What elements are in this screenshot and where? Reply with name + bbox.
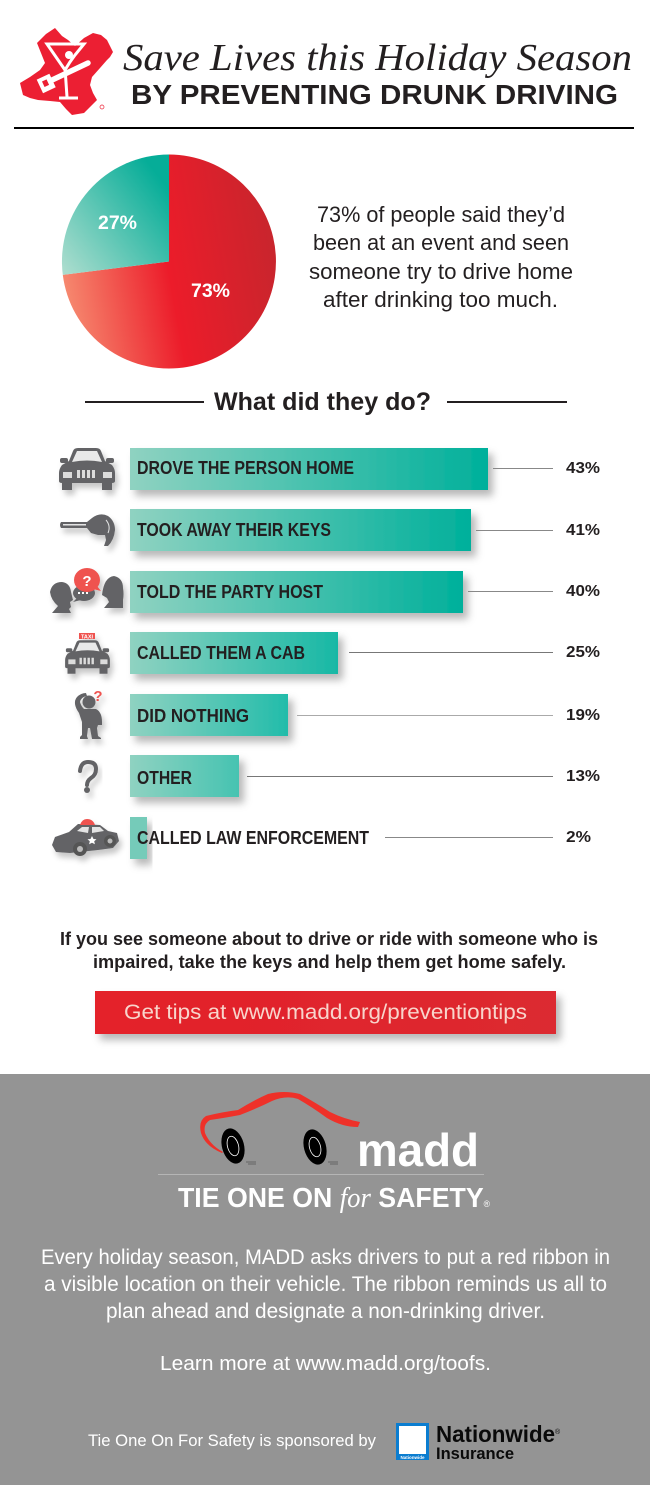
row: law enforcement: CALLED LAW ENFORCEMENT bbox=[137, 828, 369, 848]
row: drove home bbox=[59, 448, 600, 490]
row: party host: TOLD THE PARTY HOST bbox=[137, 582, 323, 602]
button: tips bbox=[95, 991, 556, 1034]
row: cab: CALLED THEM A CAB bbox=[137, 643, 305, 663]
icon: taxi bbox=[65, 633, 110, 674]
link text: Learn more at www.madd.org/toofs. bbox=[160, 1353, 491, 1375]
icon: police car bbox=[52, 819, 119, 856]
logo: Nationwide: Nationwide bbox=[400, 1455, 425, 1460]
logo: Nationwide bbox=[396, 1421, 561, 1463]
logo: madd tie one on bbox=[158, 1092, 490, 1214]
icon: confused person bbox=[75, 688, 103, 739]
panel description: a visible location on their vehicle. The ribbon reminds us all to bbox=[44, 1273, 607, 1296]
pie description: 73% of people said they’d bbox=[317, 202, 565, 227]
icon: question mark bbox=[80, 762, 96, 793]
button: tips: Get tips at www.madd.org/preventiontips bbox=[124, 1001, 527, 1024]
panel description: plan ahead and designate a non-drinking driver. bbox=[106, 1300, 545, 1323]
row: keys bbox=[60, 509, 600, 551]
logo: madd tie one on: TIE ONE ON for SAFETY® bbox=[178, 1182, 490, 1214]
icon: confused person: ? bbox=[93, 688, 103, 705]
header bbox=[14, 28, 634, 129]
advice text: If you see someone about to drive or ride with someone who is bbox=[60, 929, 598, 949]
row: did nothing bbox=[75, 688, 600, 739]
advice text: impaired, take the keys and help them get home safely. bbox=[93, 952, 566, 972]
icon: key bbox=[60, 514, 115, 546]
row: law enforcement bbox=[52, 817, 591, 859]
advice text bbox=[60, 929, 598, 972]
row: party host: 40% bbox=[566, 583, 600, 600]
row: other: OTHER bbox=[137, 768, 192, 788]
pie description: been at an event and seen bbox=[313, 230, 569, 255]
panel description bbox=[41, 1246, 610, 1323]
pie chart bbox=[62, 154, 276, 369]
row: keys: TOOK AWAY THEIR KEYS bbox=[137, 520, 331, 540]
row: law enforcement: 2% bbox=[566, 829, 591, 846]
icon: people talking: ? bbox=[82, 573, 92, 590]
logo: madd tie one on: madd bbox=[357, 1124, 479, 1176]
row: keys: 41% bbox=[566, 522, 600, 539]
row: did nothing: 19% bbox=[566, 707, 600, 724]
row: other bbox=[80, 755, 600, 797]
pie description bbox=[309, 202, 573, 312]
row: other: 13% bbox=[566, 768, 600, 785]
row: cab: 25% bbox=[566, 644, 600, 661]
icon: people talking bbox=[50, 568, 124, 613]
panel description: Every holiday season, MADD asks drivers to put a red ribbon in bbox=[41, 1246, 610, 1269]
row: party host bbox=[50, 568, 600, 613]
logo: Nationwide: Insurance bbox=[436, 1444, 514, 1463]
pie description: after drinking too much. bbox=[323, 287, 558, 312]
icon: car bbox=[59, 448, 115, 490]
pie chart: 27% bbox=[98, 213, 137, 234]
row: did nothing: DID NOTHING bbox=[137, 706, 249, 726]
row: cab bbox=[65, 632, 600, 674]
section heading: What did they do? bbox=[214, 388, 431, 416]
panel: tie one on bbox=[0, 1074, 650, 1485]
row: drove home: 43% bbox=[566, 460, 600, 477]
bar chart bbox=[50, 448, 600, 859]
title script line: Save Lives this Holiday Season bbox=[123, 37, 632, 79]
title bold line: BY PREVENTING DRUNK DRIVING bbox=[131, 79, 618, 110]
pie description: someone try to drive home bbox=[309, 259, 573, 284]
icon: taxi: TAXI bbox=[81, 634, 94, 640]
logo: Nationwide: Nationwide bbox=[436, 1421, 555, 1447]
pie chart: 73% bbox=[191, 281, 230, 302]
icon: MADD logo bbox=[20, 28, 113, 115]
sponsor text: Tie One On For Safety is sponsored by bbox=[88, 1431, 376, 1450]
logo: Nationwide: ® bbox=[555, 1428, 561, 1436]
row: drove home: DROVE THE PERSON HOME bbox=[137, 458, 354, 478]
